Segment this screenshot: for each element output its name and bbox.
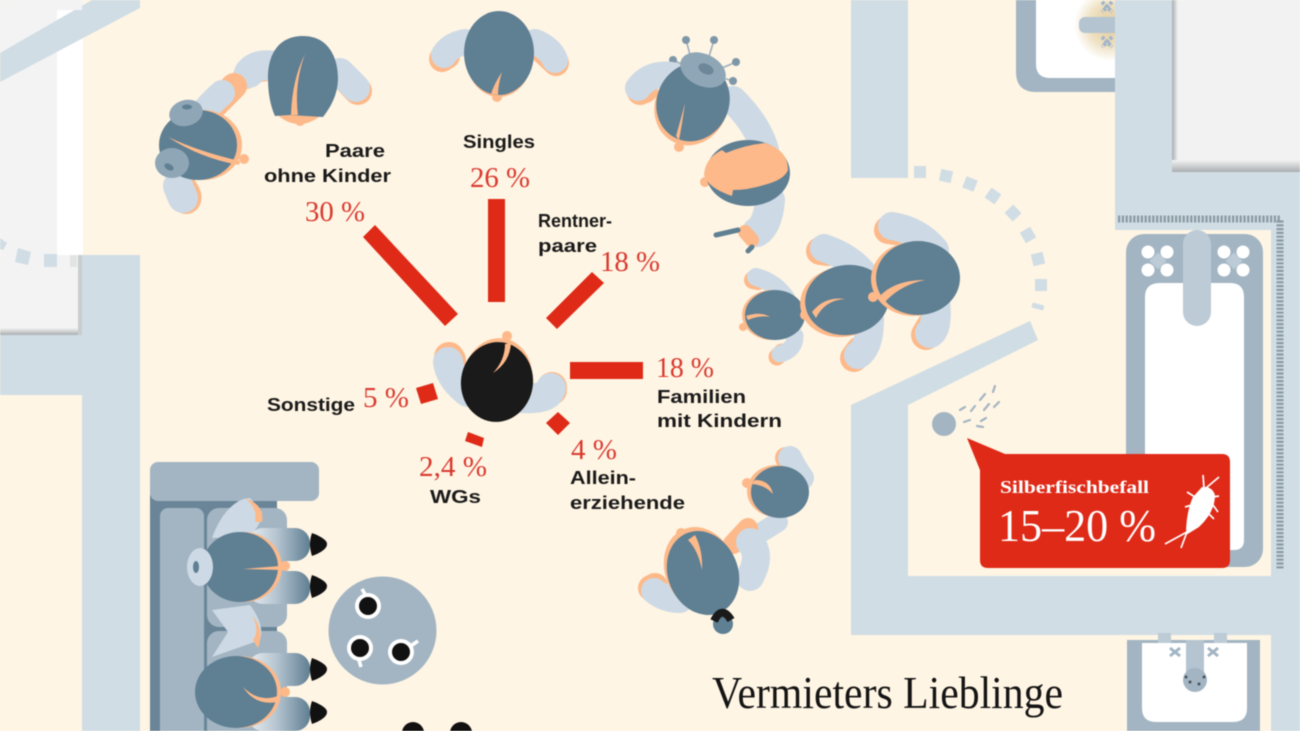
label: Paare ohne Kinder 30 % — [264, 141, 391, 228]
floor plan: right rooms and walls — [851, 0, 1300, 731]
label: Paare ohne Kinder 30 %: 30 % — [305, 197, 365, 228]
person: elderly partner with walker — [638, 36, 765, 157]
bar: WGs — [465, 432, 484, 447]
label: WGs 2,4 % — [419, 452, 487, 507]
person group: single parent with child and baby — [651, 458, 809, 634]
callout: silverfish infestation — [967, 438, 1230, 568]
bathtub — [1126, 230, 1263, 567]
sofa — [150, 462, 319, 731]
label: Alleinerziehende 4 % — [570, 435, 685, 513]
bar: Rentnerpaare — [546, 272, 604, 329]
label: Singles 26 % — [463, 132, 535, 194]
label: Familien mit Kindern 18 %: mit Kindern — [657, 411, 782, 431]
silverfish spot on the wall — [932, 386, 999, 436]
label: Familien mit Kindern 18 %: Familien — [657, 387, 746, 407]
label: Familien mit Kindern 18 %: 18 % — [656, 353, 714, 384]
floor plan: left rooms and walls — [0, 0, 140, 731]
icon: silverfish — [1165, 475, 1219, 548]
label: Alleinerziehende 4 %: Allein- — [570, 468, 636, 488]
bar: Sonstige — [416, 383, 438, 404]
person group: family with children — [739, 226, 960, 358]
label: Alleinerziehende 4 %: 4 % — [571, 435, 617, 466]
label: Sonstige 5 %: Sonstige — [267, 395, 355, 415]
label: Sonstige 5 %: 5 % — [363, 383, 409, 414]
label: Rentnerpaare 18 % — [538, 211, 660, 278]
bar chart: household types — [363, 199, 643, 447]
title: Vermieters Lieblinge — [712, 667, 1063, 718]
callout label: Silberfischbefall — [1000, 477, 1149, 497]
central person — [448, 331, 552, 427]
label: Familien mit Kindern 18 % — [656, 353, 782, 431]
callout value: 15–20 % — [998, 501, 1156, 551]
label: WGs 2,4 %: WGs — [430, 487, 481, 507]
label: Rentnerpaare 18 %: Rentner- — [538, 211, 612, 231]
door swing dashes — [914, 166, 1047, 310]
person: seated on sofa, upper — [187, 498, 327, 604]
person: couple, upper partner — [246, 36, 358, 126]
person: bald elderly partner with cane — [700, 140, 790, 251]
person: seated on sofa, lower — [195, 605, 327, 731]
coffee table with cups — [328, 576, 436, 684]
label: Alleinerziehende 4 %: erziehende — [570, 493, 685, 513]
label: Singles 26 %: Singles — [463, 132, 535, 152]
person: couple, left partner with cups — [155, 86, 249, 199]
bar: Familien mit Kindern — [570, 362, 643, 379]
top sink — [1016, 0, 1116, 92]
bar: Singles — [488, 199, 505, 302]
person: single — [442, 11, 556, 102]
bottom sink — [1127, 633, 1260, 731]
label: Singles 26 %: 26 % — [470, 163, 530, 194]
label: WGs 2,4 %: 2,4 % — [419, 452, 487, 483]
label: Rentnerpaare 18 %: 18 % — [600, 247, 660, 278]
label: Paare ohne Kinder 30 %: Paare — [325, 141, 385, 161]
shoes at bottom edge — [402, 722, 472, 731]
label: Rentnerpaare 18 %: paare — [538, 236, 597, 256]
label: Sonstige 5 % — [267, 383, 409, 415]
bar: Alleinerziehende — [546, 412, 570, 435]
label: Paare ohne Kinder 30 %: ohne Kinder — [264, 166, 391, 186]
bar: Paare ohne Kinder — [363, 225, 458, 326]
